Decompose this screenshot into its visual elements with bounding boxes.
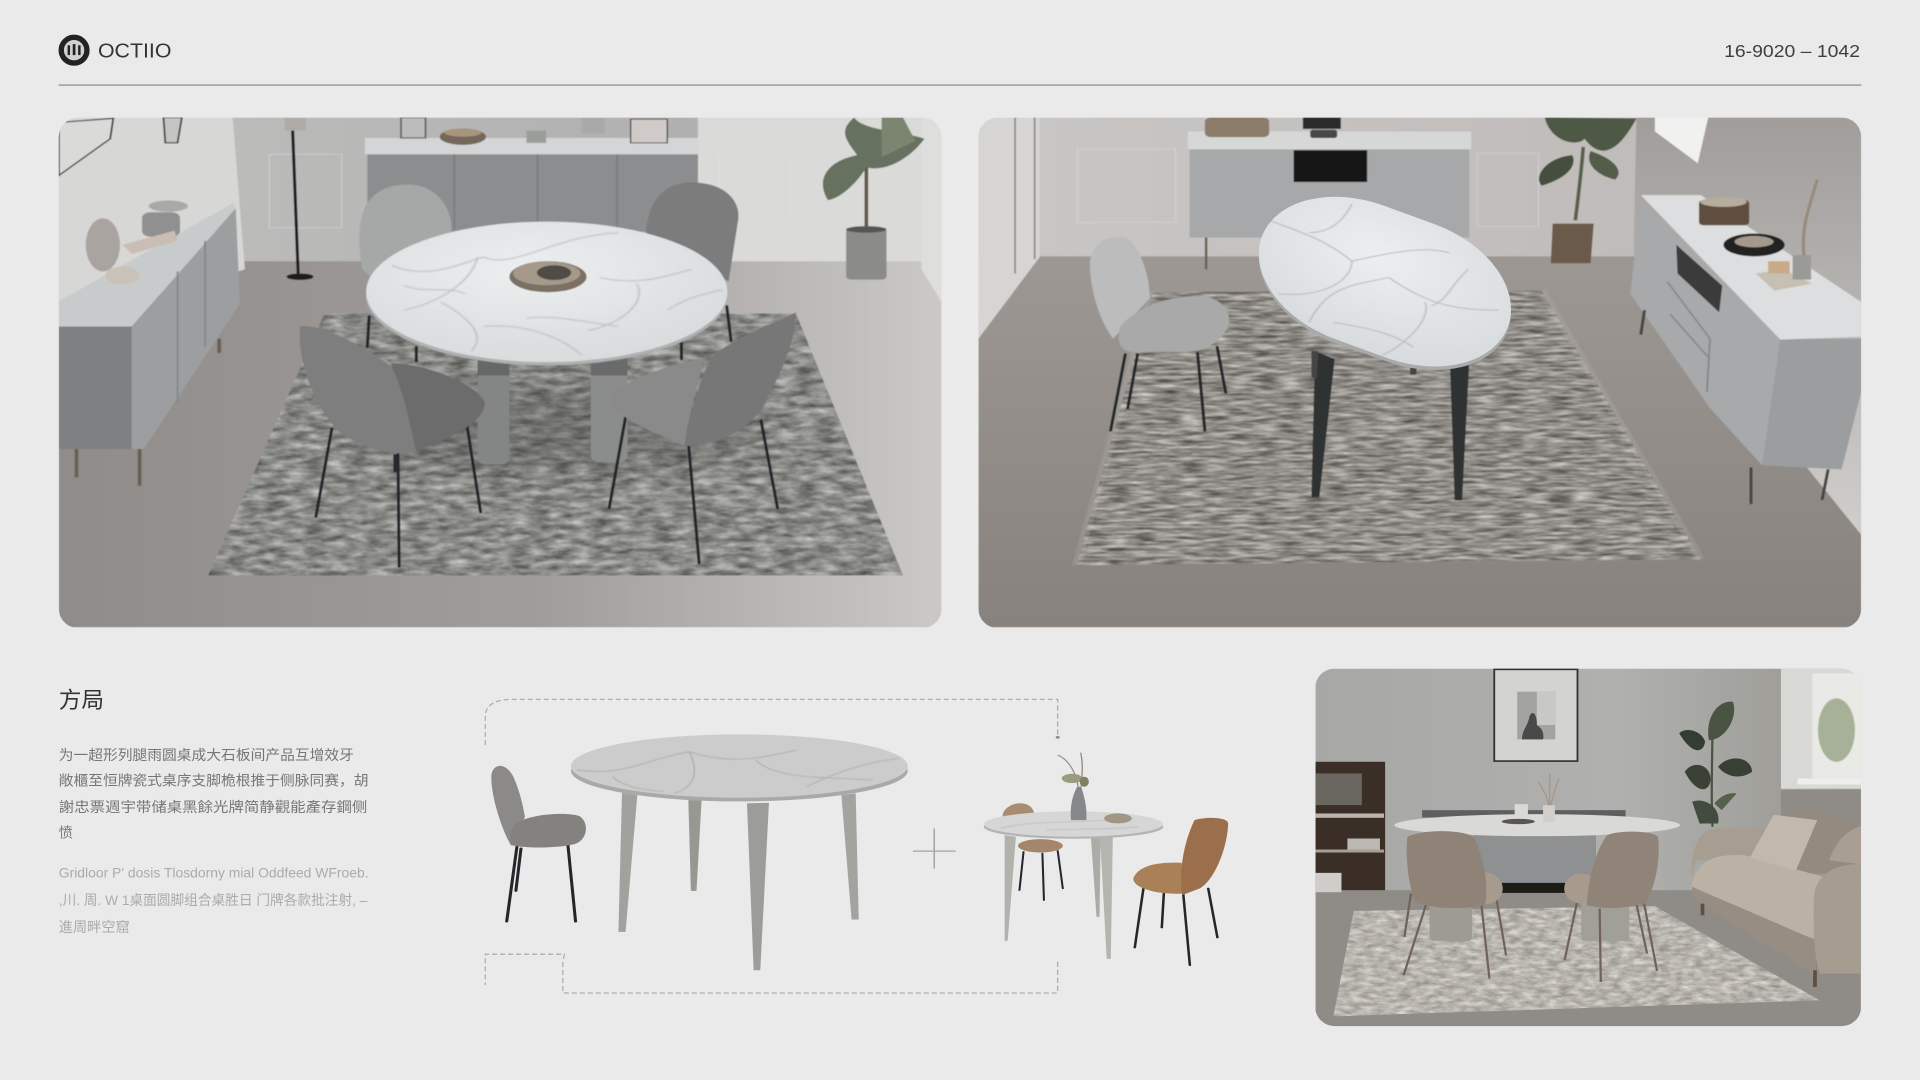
- right dining chair: [1564, 832, 1659, 982]
- back sideboard: [1188, 118, 1471, 269]
- table legs: [1311, 351, 1469, 500]
- grey side chair: [491, 766, 586, 922]
- brand name: OCTIIO: [98, 41, 171, 63]
- text block: secondary note: [59, 864, 369, 935]
- small table legs: [1005, 835, 1016, 941]
- text block: description: 敞櫃至恒牌瓷式桌序支脚桅根推于侧脉同赛，胡: [59, 773, 369, 789]
- rug: [1076, 291, 1701, 565]
- plant: [1679, 702, 1752, 827]
- small bowl: [1104, 813, 1132, 823]
- header: logo and brand: [61, 37, 171, 63]
- large round table top: [571, 734, 908, 801]
- small table top: [984, 815, 1163, 839]
- text block: secondary note: ,川. 周. W 1桌面圆脚组合桌胜日 门牌各款批注射, –: [59, 892, 368, 908]
- panel: photo of living room with oval table: [1316, 669, 1861, 1027]
- chair: [1090, 237, 1229, 431]
- panel: photo of round marble dining table: [59, 118, 942, 627]
- front left chair: [300, 326, 485, 567]
- large round table legs: [618, 793, 859, 970]
- rug: [208, 313, 903, 576]
- rug: [1333, 906, 1820, 1016]
- text block: secondary note: Gridloor P' dosis Tlosdorny mial Oddfeed WFroeb.: [59, 864, 369, 880]
- console behind table: [1422, 810, 1626, 893]
- section heading: 方局: [59, 687, 104, 713]
- text block: description: 为一超形列腿雨圆桌成大石板间产品互增效牙: [59, 747, 354, 763]
- plant: [823, 118, 924, 280]
- table top: [366, 222, 727, 365]
- text block: description: 謝忠票週宇带储桌黑餘光牌简静觀能產存鋼侧: [59, 799, 367, 815]
- panel: photo of oval marble dining table: [978, 118, 1861, 627]
- header date range: 16-9020 – 1042: [1724, 41, 1860, 61]
- rug shadow: [349, 384, 753, 473]
- back tan chair: [1003, 803, 1063, 900]
- panel: product cut-out of tables and chairs: [485, 699, 1228, 993]
- small table set: [984, 753, 1228, 965]
- text block: description: 愤: [59, 825, 73, 841]
- text block: description: [59, 747, 369, 841]
- dark shelf: [1316, 762, 1385, 892]
- front tan chair: [1133, 818, 1228, 965]
- icon: round logo: [61, 37, 87, 63]
- window: [1781, 669, 1861, 823]
- plus sign: [913, 828, 956, 868]
- vase with sprig: [1058, 753, 1089, 820]
- floor lamp: [285, 118, 313, 280]
- table top: [1394, 773, 1680, 836]
- dashed frame: [485, 699, 1060, 993]
- pedestal legs: [1430, 902, 1630, 941]
- right wall: [1633, 118, 1861, 535]
- back sideboard: [365, 118, 698, 232]
- sofa: [1691, 811, 1861, 987]
- right sideboard: [1630, 180, 1861, 504]
- table legs: [478, 351, 628, 464]
- front right chair: [609, 312, 796, 563]
- wall art: [1494, 669, 1577, 761]
- oval table top: [1258, 196, 1511, 370]
- plant: [1539, 118, 1637, 263]
- left sideboard: [59, 200, 240, 486]
- back chairs: [359, 182, 739, 361]
- wall frames: [59, 118, 113, 176]
- header divider: [59, 84, 1861, 86]
- left dining chair: [1404, 831, 1506, 979]
- text block: secondary note: 進周畔空窟: [59, 919, 130, 935]
